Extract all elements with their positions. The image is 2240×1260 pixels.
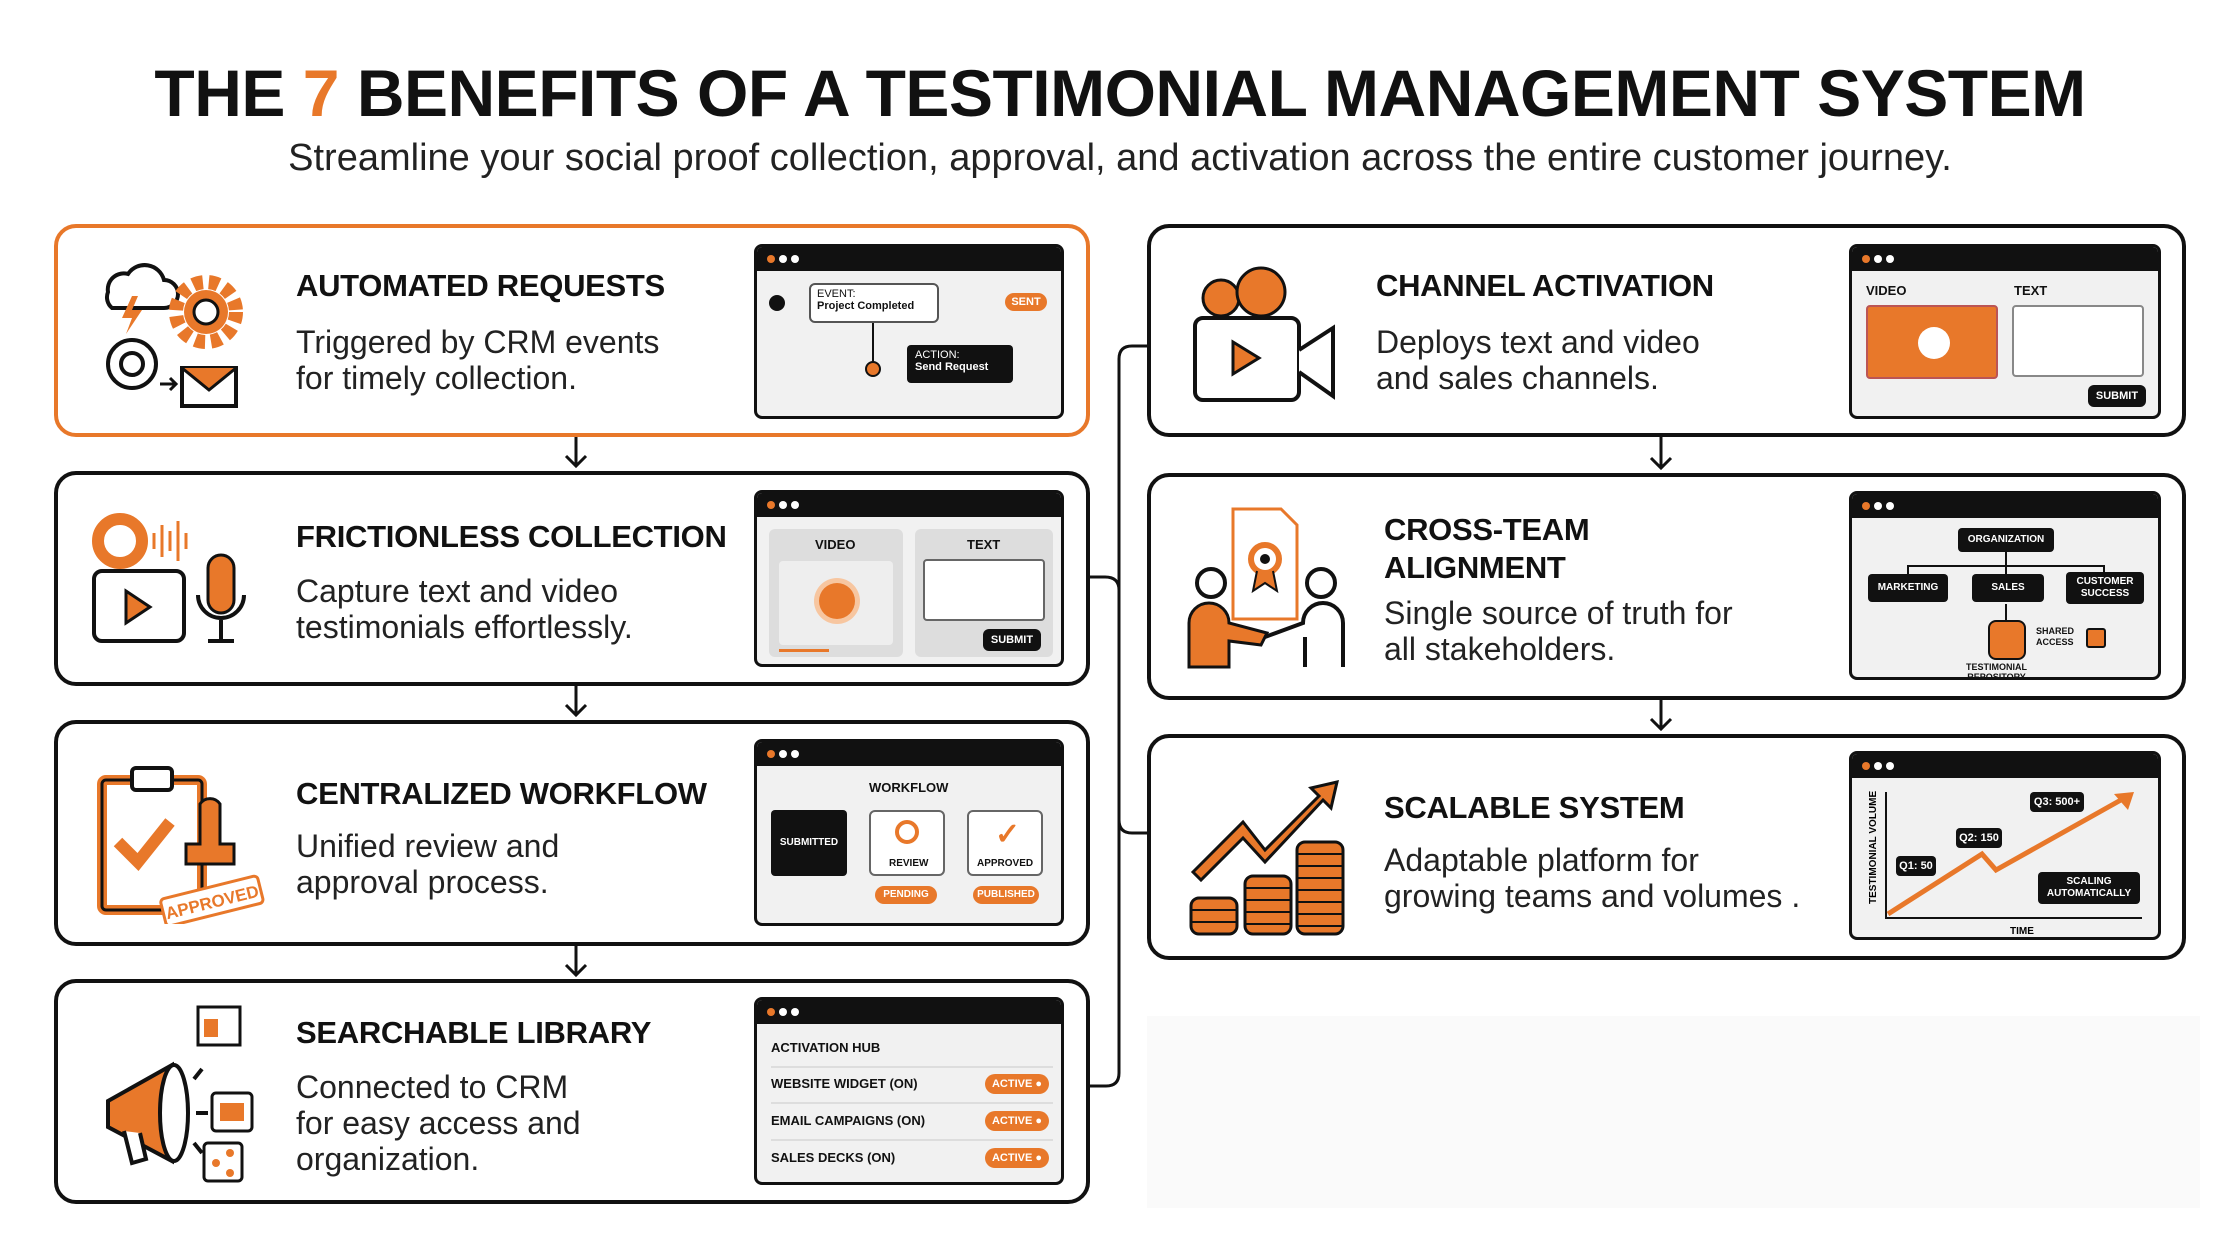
text: Single source of truth for [1384,595,1733,631]
text [1376,324,1700,396]
mockup: workflow: APPROVED [977,858,1033,869]
mockup: activation hub: ACTIVE ● [992,1078,1042,1090]
icon: gears and mail [104,263,243,408]
mockup: activation hub: EMAIL CAMPAIGNS (ON) [771,1113,925,1128]
icon: clipboard and stamp: APPROVED [164,882,261,923]
text [1384,595,1733,667]
heading: CENTRALIZED WORKFLOW [296,776,707,811]
mockup: org chart: CUSTOMER [2076,576,2134,587]
text [296,324,659,396]
text: Connected to CRM [296,1069,568,1105]
mockup: org chart: SUCCESS [2081,588,2129,599]
mockup: channels: VIDEO [1866,283,1906,298]
mockup: workflow: REVIEW [889,858,928,869]
mockup: workflow: PUBLISHED [977,889,1035,900]
mockup: org chart: TESTIMONIAL [1966,662,2027,672]
heading: SEARCHABLE LIBRARY [296,1015,651,1050]
mockup: workflow: ✓ [995,818,1020,851]
mockup: growth chart: Q3: 500+ [2034,796,2080,808]
mockup: video/text form [754,490,1064,667]
icon: handshake with certificate [1188,508,1345,668]
heading [1384,512,1589,585]
icon: video and mic [92,513,246,643]
icon: megaphone [106,1006,254,1182]
title: THE 7 BENEFITS OF A TESTIMONIAL MANAGEMENT SYSTEM [154,56,2086,130]
heading: ALIGNMENT [1384,550,1566,585]
text: Adaptable platform for [1384,842,1699,878]
heading: CHANNEL ACTIVATION [1376,268,1714,303]
mockup: growth chart [1849,751,2161,940]
mockup: channels [1849,244,2161,419]
mockup: workflow [754,739,1064,926]
text: for easy access and [296,1105,581,1141]
text: Triggered by CRM events [296,324,659,360]
text: Unified review and [296,828,559,864]
mockup: growth chart: Q1: 50 [1899,860,1933,872]
mockup: video/text form: SUBMIT [991,634,1033,646]
text [296,1069,581,1177]
mockup: event flow: Project Completed [817,300,914,312]
mockup: workflow: SUBMITTED [780,837,838,848]
text: all stakeholders. [1384,631,1615,667]
mockup: growth chart: Q2: 150 [1959,832,1999,844]
mockup: org chart: SALES [1991,582,2025,593]
heading: FRICTIONLESS COLLECTION [296,519,727,554]
panel: scalable system [1147,734,2186,960]
mockup: channels: SUBMIT [2096,390,2138,402]
mockup: org chart: ORGANIZATION [1968,534,2044,545]
mockup: org chart: SHARED [2036,626,2074,636]
mockup: event flow: SENT [1011,296,1041,308]
mockup: growth chart: SCALING [2066,876,2112,887]
panel: frictionless collection [54,471,1090,686]
mockup: event flow [754,244,1064,419]
text: and sales channels. [1376,360,1659,396]
icon: clipboard and stamp [97,766,264,924]
heading: AUTOMATED REQUESTS [296,268,665,303]
mockup: activation hub [754,997,1064,1185]
panel: automated requests [54,224,1090,437]
blank area [1147,1016,2200,1208]
panel: centralized workflow [54,720,1090,946]
mockup: workflow: WORKFLOW [869,780,948,795]
mockup: activation hub: SALES DECKS (ON) [771,1150,895,1165]
mockup: org chart [1849,491,2161,680]
text [296,828,559,900]
text: approval process. [296,864,549,900]
mockup: org chart: ACCESS [2036,637,2074,647]
mockup: activation hub: ACTIVE ● [992,1115,1042,1127]
text: growing teams and volumes . [1384,878,1800,914]
panel: cross-team alignment [1147,473,2186,700]
mockup: event flow: Send Request [915,361,988,373]
mockup: growth chart: AUTOMATICALLY [2047,888,2131,899]
heading: SCALABLE SYSTEM [1384,790,1684,825]
mockup: video/text form: TEXT [967,537,1000,552]
text: Capture text and video [296,573,618,609]
mockup: event flow: EVENT: [817,288,856,300]
text: organization. [296,1141,479,1177]
icon: video camera [1193,266,1335,402]
mockup: growth chart: TESTIMONIAL VOLUME [1868,791,1879,904]
mockup: org chart: MARKETING [1878,582,1938,593]
mockup: activation hub: ACTIVE ● [992,1152,1042,1164]
panel: searchable library [54,979,1090,1204]
heading: CROSS-TEAM [1384,512,1589,547]
mockup: growth chart: TIME [2010,926,2034,937]
mockup: workflow: PENDING [883,889,929,900]
text: testimonials effortlessly. [296,609,633,645]
text: Deploys text and video [1376,324,1700,360]
text [296,573,633,645]
mockup: video/text form: VIDEO [815,537,855,552]
mockup: event flow: ACTION: [915,349,960,361]
text [1384,842,1800,914]
subtitle: Streamline your social proof collection, approval, and activation across the entire customer journey. [288,137,1952,179]
icon: growth coins [1190,780,1344,936]
mockup: activation hub: ACTIVATION HUB [771,1040,880,1055]
text: for timely collection. [296,360,577,396]
mockup: channels: TEXT [2014,283,2047,298]
mockup: activation hub: WEBSITE WIDGET (ON) [771,1076,918,1091]
panel: channel activation [1147,224,2186,437]
